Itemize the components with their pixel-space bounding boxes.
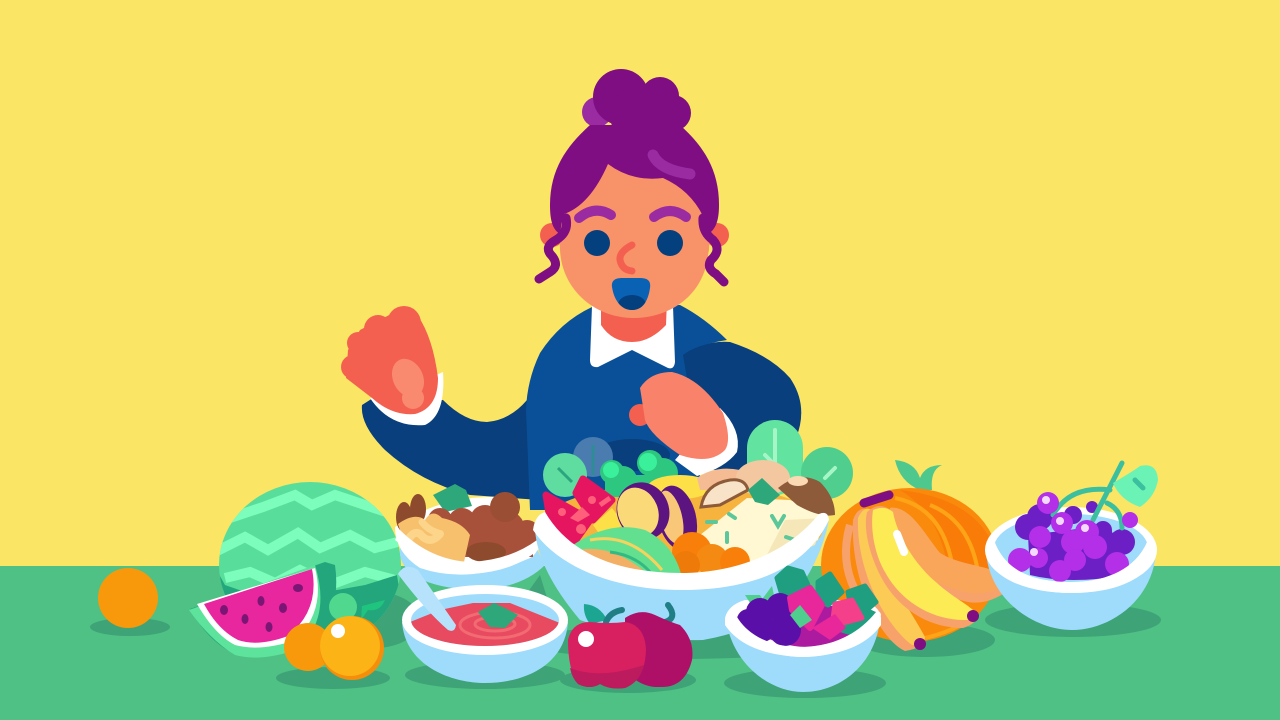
hair bun (582, 69, 691, 145)
collar (590, 306, 675, 368)
character: woman (341, 69, 801, 510)
bowl interior (539, 483, 823, 573)
right hand (629, 372, 728, 459)
hair (550, 125, 719, 235)
cashews (398, 513, 470, 562)
right arm (680, 342, 801, 470)
right cuff (675, 408, 738, 476)
palm highlight (386, 354, 430, 409)
large leaves (747, 420, 853, 499)
background: yellow wall (0, 0, 1280, 566)
pumpkin (820, 460, 1000, 645)
grapes dark (1015, 501, 1135, 580)
oranges pair (284, 593, 385, 680)
ears (540, 223, 729, 247)
table: green surface (0, 566, 1280, 720)
leaf left (543, 453, 587, 497)
bananas (853, 495, 1015, 651)
eggplant slices (608, 474, 703, 555)
bowl: berries (725, 568, 881, 692)
bowl: grapes (985, 463, 1158, 630)
left arm (362, 398, 545, 500)
mouth (612, 278, 650, 310)
bowl body (535, 520, 829, 640)
small leaves (745, 586, 775, 606)
banana back (888, 508, 1009, 603)
grapes (737, 593, 801, 646)
mushroom left (701, 480, 748, 507)
face (560, 164, 709, 318)
eyebrows (579, 211, 686, 218)
food base (737, 604, 876, 647)
faint leaf (573, 437, 613, 477)
yellow pieces (593, 475, 712, 535)
strawberry leaves (777, 568, 876, 634)
bowl rim front (985, 540, 1157, 593)
rice (700, 498, 825, 572)
left cuff (370, 372, 443, 425)
apple stems (606, 605, 672, 622)
apple leaf (584, 604, 607, 624)
banana left (853, 509, 925, 651)
parsley (748, 478, 780, 505)
apples (568, 604, 692, 688)
left hand (341, 306, 438, 414)
standalone orange (98, 568, 158, 628)
bowl: center large (533, 420, 853, 640)
avocado (573, 527, 682, 578)
carrots (672, 532, 750, 579)
bowl rim front (725, 611, 881, 657)
grape stem (1053, 463, 1122, 528)
front apple (568, 622, 646, 688)
watermelon whole (219, 482, 401, 630)
red vegetable (546, 479, 612, 544)
spoon (398, 567, 456, 631)
eyes (584, 230, 683, 256)
strawberries (790, 588, 862, 640)
banana stem cap (864, 495, 889, 503)
neck (601, 300, 667, 342)
parsley (433, 484, 472, 512)
grape leaf (1113, 465, 1158, 507)
nut pile (396, 492, 540, 563)
curls (539, 218, 724, 282)
ground shadows (90, 575, 1161, 698)
sweater shadow (594, 439, 670, 471)
banana middle (866, 506, 976, 628)
mushroom right (778, 476, 835, 516)
hair highlight (653, 155, 690, 174)
bowl rim front (533, 512, 829, 590)
parsley (478, 603, 518, 628)
back apple (625, 612, 692, 687)
grapes light (1008, 492, 1138, 582)
nose (620, 245, 632, 271)
strawberry leaf front (790, 605, 812, 628)
torso sweater (526, 305, 727, 510)
bowl: nuts (395, 484, 545, 590)
watermelon slice (189, 562, 336, 658)
banana highlight (897, 534, 904, 552)
broccoli (600, 450, 678, 497)
bowl: soup (398, 567, 568, 683)
mushrooms back (697, 460, 790, 496)
